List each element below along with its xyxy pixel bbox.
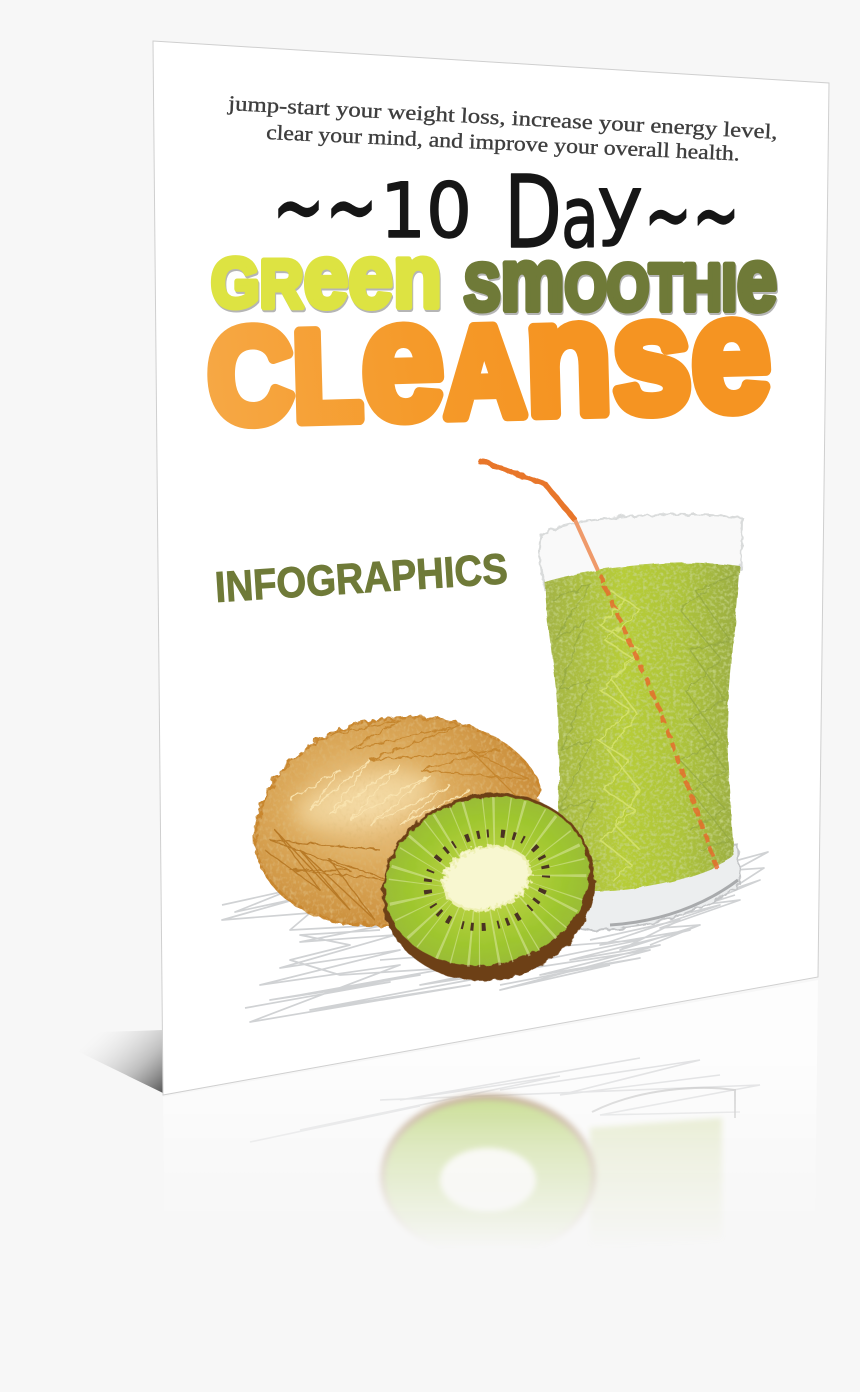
- tagline line 1: jump-start your weight loss, increase your energy level,: [227, 91, 778, 144]
- reflection of poster: [250, 1058, 760, 1234]
- reflected glass base: [592, 1088, 735, 1118]
- glass rim: [540, 514, 742, 590]
- whole kiwi: [256, 717, 540, 925]
- tagline: [227, 91, 778, 165]
- seed ring: [417, 821, 556, 939]
- infographic cover scene: [93, 40, 830, 1234]
- heading: 10 Day: D: [504, 154, 562, 271]
- green word: GReen: [211, 227, 442, 327]
- heading: 10 Day: a: [561, 168, 599, 268]
- reflected paper: [163, 980, 818, 1260]
- kiwi highlight: [290, 762, 440, 838]
- reflected kiwi center: [440, 1148, 536, 1212]
- scribble lines left: [222, 890, 480, 1022]
- dark fibres: [265, 830, 390, 920]
- green shadow: GReen: [212, 229, 443, 329]
- heading: Green: [211, 227, 443, 329]
- smoothie body: [545, 563, 740, 891]
- pale fibres: [290, 760, 470, 825]
- heading: 10 Day: ~~: [272, 150, 378, 264]
- reflected kiwi rim: [378, 1090, 597, 1219]
- flesh rays: [404, 810, 571, 954]
- reflected glass: [588, 1116, 724, 1215]
- reflected scribble: [250, 1058, 760, 1142]
- halved kiwi: [362, 771, 615, 1003]
- heading: 10 Day: ~~: [644, 161, 740, 268]
- tagline line 2: clear your mind, and improve your overall health.: [266, 120, 740, 165]
- straw upper: [478, 460, 575, 520]
- glass with smoothie: [478, 460, 742, 930]
- heading: 10 Day: 10: [380, 166, 472, 255]
- smoothie word: SmOOTHIe: [464, 230, 777, 329]
- kiwi skin: [256, 717, 540, 925]
- kiwi flesh: [367, 776, 607, 987]
- poster sheet: [153, 41, 829, 1095]
- kiwi fibres: [265, 720, 530, 920]
- smoothie shadow: SmOOTHIe: [465, 232, 778, 331]
- scribble lines center: [380, 895, 735, 990]
- straw through drink: [600, 575, 718, 870]
- ground scribble shadow: [222, 852, 768, 1022]
- poster drop shadow: [42, 1030, 163, 1093]
- subheading: infographics: INFOGRAPHICS: [214, 545, 509, 612]
- top fibres: [330, 720, 530, 800]
- dark scribble on juice sides: [552, 575, 735, 870]
- straw inside rim: [575, 520, 600, 575]
- pale scribble highlight: [598, 590, 640, 880]
- reflected kiwi flesh: [386, 1098, 591, 1212]
- heading: Smoothie: [464, 230, 778, 331]
- scribble lines right: [660, 852, 768, 928]
- glass base shade: [610, 880, 738, 925]
- kiwi rim: [362, 771, 615, 1003]
- glass base: [556, 845, 740, 930]
- kiwi core: [436, 837, 536, 919]
- heading: Cleanse: CLeAnse: [205, 256, 773, 459]
- heading: 10 Day: y: [597, 159, 643, 248]
